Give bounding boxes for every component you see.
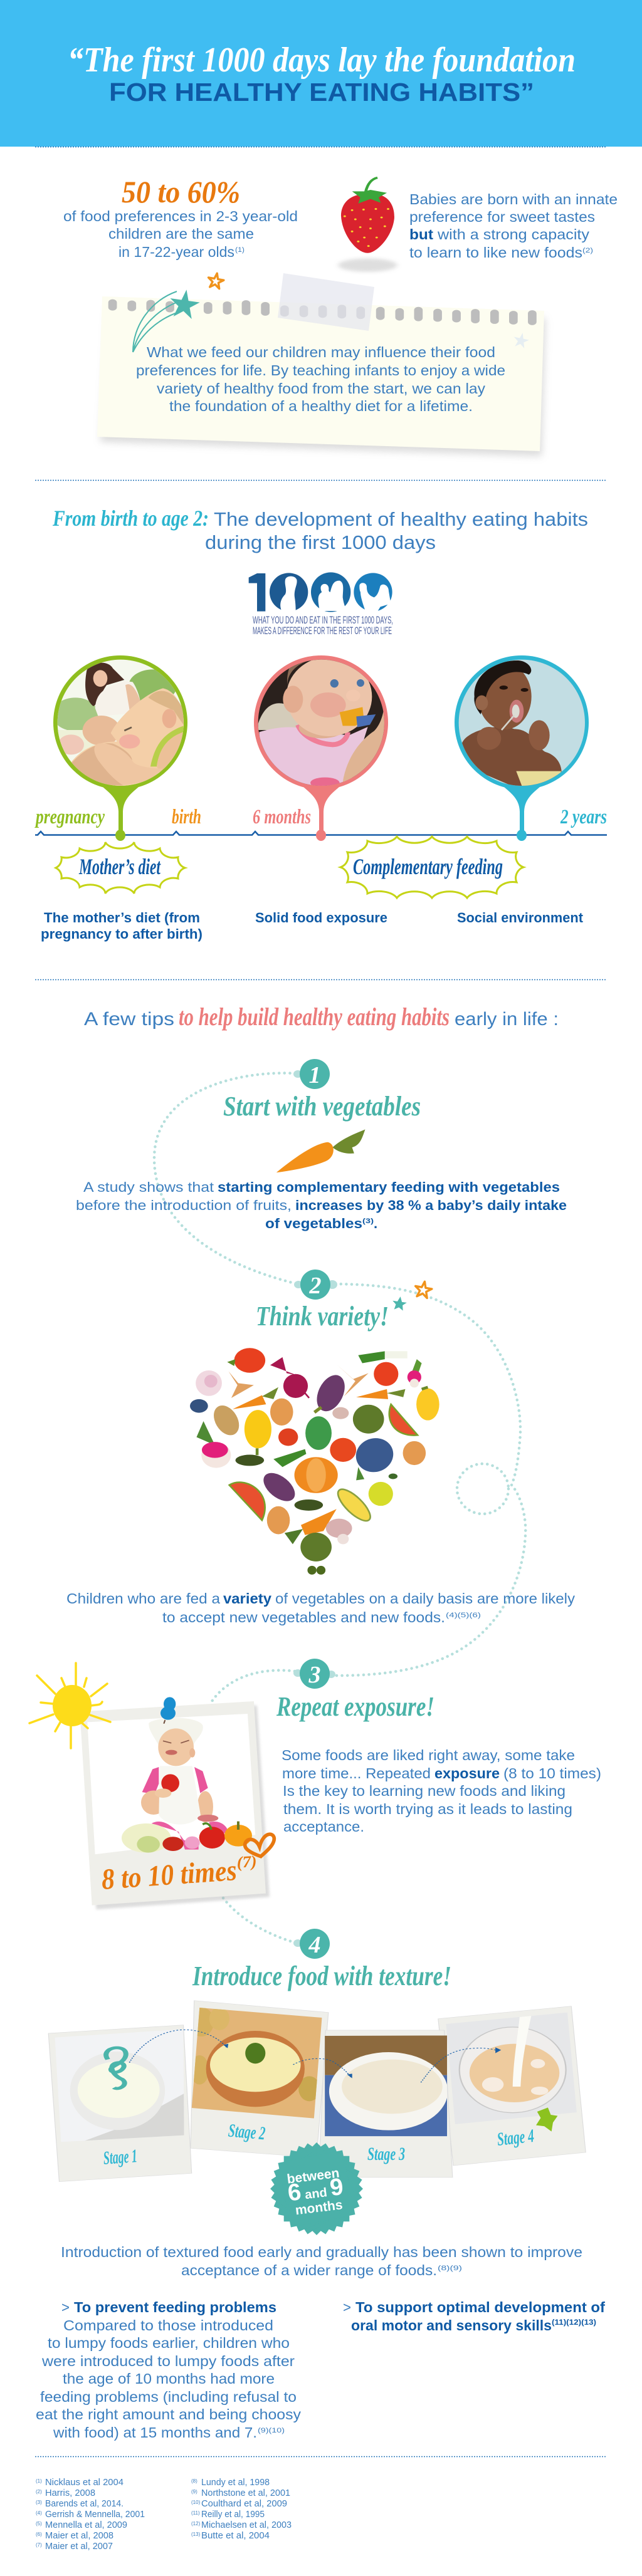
number 3: 3: [308, 1662, 321, 1688]
dotted path connectors: [154, 1073, 525, 1942]
text: variety: variety: [223, 1590, 271, 1607]
icon: orange star: [414, 1280, 433, 1298]
references column 1: Barends et al, 2014.: [45, 2498, 124, 2509]
references column 1: Maier et al, 2007: [45, 2541, 113, 2552]
text: mother's diet: [41, 910, 203, 942]
title line 2: FOR HEALTHY EATING HABITS”: [109, 78, 534, 107]
references column 1: (7): [36, 2542, 42, 2548]
references column 2: Reilly et al, 1995: [201, 2509, 265, 2520]
pin: pregnancy photo: [52, 655, 187, 841]
label: pregnancy: pregnancy: [34, 806, 105, 828]
references column 2: Butte et al, 2004: [201, 2530, 270, 2541]
badge: between 6 and 9 months: [270, 2142, 363, 2235]
text: babies preference: to learn to like new foods: [409, 244, 582, 261]
label: 6 months: 6 months: [253, 806, 311, 828]
text: babies preference: preference for sweet tastes: [409, 209, 595, 225]
text: repeated exposure: more time... Repeated: [282, 1765, 431, 1781]
heading: think variety: Think variety!: [256, 1301, 389, 1332]
tape: [278, 273, 374, 331]
heading: a few tips: to help build healthy eating habits: [179, 1003, 450, 1031]
header banner: [0, 0, 642, 147]
text: study: of vegetables: [265, 1216, 362, 1231]
text: prevent feeding problems: eat the right amount and being choosy: [36, 2406, 302, 2422]
pin: 6 months photo: [254, 655, 389, 841]
references column 1: (3): [36, 2500, 42, 2505]
text: oral motor skills: oral motor and sensory skills: [351, 2317, 552, 2334]
callout: complementary feeding: Complementary feeding: [353, 854, 503, 879]
text: mother's diet: The mother’s diet (from: [44, 910, 200, 926]
label: stage 3: Stage 3: [367, 2144, 405, 2164]
text: introduction of textured food: (8)(9): [438, 2265, 462, 2272]
references column 1: (6): [36, 2532, 42, 2537]
text: mother's diet: pregnancy to after birth): [41, 926, 203, 942]
references column 1: Harris, 2008: [45, 2488, 95, 2498]
heading: from birth to age 2: during the first 1000 days: [205, 531, 436, 553]
number 4: 4: [308, 1932, 321, 1958]
panel: notepaper: [97, 272, 545, 456]
references column 2: Michaelsen et al, 2003: [201, 2520, 292, 2530]
photo: stage 3: [318, 2030, 453, 2177]
text: variety: Children who are fed a: [66, 1590, 220, 1607]
references column 2: Lundy et al, 1998: [201, 2477, 270, 2488]
text: study: starting complementary feeding with vegetables: [218, 1179, 560, 1195]
stat: 50 to 60%: in 17-22-year olds: [118, 244, 234, 260]
text: prevent feeding problems: were introduced to lumpy foods after: [41, 2353, 295, 2369]
heading: from birth to age 2: The development of healthy eating habits: [214, 508, 588, 530]
text: prevent feeding problems: Compared to those introduced: [63, 2317, 273, 2334]
references column 1: (1): [36, 2478, 42, 2484]
text: prevent feeding problems: (9)(10): [258, 2427, 285, 2434]
references column 2: [191, 2477, 292, 2541]
references column 2: Northstone et al, 2001: [201, 2488, 290, 2498]
text: study: (3): [362, 1218, 374, 1225]
stat: 50 to 60%: of food preferences in 2-3 year-old: [63, 208, 298, 224]
note text: variety of healthy food from the start, we can lay: [157, 380, 486, 397]
number 1: [293, 1059, 330, 1089]
text: oral motor skills: [343, 2299, 605, 2334]
text: oral motor skills: (11)(12)(13): [552, 2318, 596, 2327]
icon: orange star: [207, 272, 224, 289]
heading: a few tips: A few tips: [84, 1009, 174, 1030]
caption: 8 to 10 times: 8 to 10 times: [100, 1854, 238, 1896]
text: variety: of vegetables on a daily basis are more likely: [275, 1590, 576, 1607]
text: variety: [66, 1590, 576, 1625]
text: variety: (4)(5)(6): [446, 1612, 481, 1619]
logo: 1000 days: [249, 572, 393, 637]
references column 1: Nicklaus et al 2004: [45, 2477, 124, 2488]
references column 2: (11): [191, 2510, 200, 2516]
label: stage 1: Stage 1: [103, 2146, 138, 2169]
references column 2: (8): [191, 2478, 197, 2484]
text: prevent feeding problems: [36, 2299, 302, 2441]
references column 2: (10): [191, 2500, 201, 2505]
references column 1: (5): [36, 2521, 42, 2526]
note text: the foundation of a healthy diet for a lifetime.: [169, 398, 473, 414]
callout: mother's diet: [56, 842, 185, 894]
references column 2: Coulthard et al, 2009: [201, 2498, 287, 2509]
icon: blue pushpin: [160, 1697, 176, 1724]
label: birth: birth: [172, 806, 201, 828]
number 4: [293, 1929, 330, 1959]
icon: carrot: [276, 1129, 365, 1172]
text: repeated exposure: (8 to 10 times): [503, 1765, 601, 1781]
text: babies preference: (2): [582, 247, 593, 254]
icon: shooting star: [133, 288, 201, 352]
caption: 8 to 10 times: (7): [236, 1852, 257, 1872]
number 2: [294, 1270, 337, 1300]
heading: repeat exposure: Repeat exposure!: [276, 1691, 434, 1722]
icon: faint star: [512, 331, 530, 349]
text: repeated exposure: exposure: [434, 1765, 500, 1781]
logo: 1000 days: WHAT YOU DO AND EAT IN THE FIRST 1000 DAYS,: [253, 614, 393, 626]
badge: between 6 and 9 months: 6 and 9: [287, 2174, 345, 2206]
icon: green star: [536, 2107, 557, 2132]
icon: orange heart: [245, 1834, 274, 1857]
heading: from birth to age 2: [52, 506, 588, 553]
icon: sun: [29, 1663, 110, 1748]
references column 1: Gerrish & Mennella, 2001: [45, 2509, 145, 2520]
text: repeated exposure: acceptance.: [283, 1818, 364, 1835]
number 1: 1: [308, 1062, 321, 1088]
icon: teal swirl: [106, 2048, 126, 2088]
callout: mother's diet: Mother’s diet: [78, 854, 161, 879]
text: study: A study shows that: [83, 1179, 214, 1195]
text: repeated exposure: Is the key to learning new foods and liking: [283, 1783, 566, 1799]
photos: texture stages: [48, 2001, 586, 2182]
text: babies preference: Babies are born with an innate: [409, 191, 618, 207]
photo: stage 2: [189, 2001, 329, 2157]
text: prevent feeding problems: the age of 10 months had more: [63, 2370, 275, 2387]
references column 1: (4): [36, 2510, 42, 2516]
note text: preferences for life. By teaching infants to enjoy a wide: [136, 362, 505, 378]
heading: a few tips: early in life :: [455, 1009, 559, 1030]
text: babies preference: [409, 191, 618, 261]
stat: 50 to 60%: children are the same: [108, 226, 254, 242]
references column 2: (13): [191, 2532, 201, 2537]
text: babies preference: but: [409, 226, 433, 242]
text: repeated exposure: them. It is worth trying as it leads to lasting: [283, 1801, 572, 1817]
label: stage 4: Stage 4: [496, 2125, 535, 2150]
text: prevent feeding problems: To prevent feeding problems: [74, 2299, 276, 2315]
text: variety: to accept new vegetables and new foods.: [162, 1609, 445, 1625]
stat: 50 to 60%: 50 to 60%: [122, 174, 240, 209]
photo: polaroid baby: [80, 1697, 274, 1909]
pin: 2 years photo: [455, 655, 589, 841]
icon: strawberry: [338, 178, 397, 272]
note text: [136, 344, 505, 414]
logo: 1000 days: MAKES A DIFFERENCE FOR THE REST OF YOUR LIFE: [253, 625, 392, 637]
photo: stage 4: [438, 2006, 586, 2166]
text: introduction of textured food: Introduction of textured food early and gradually has been shown to improve: [61, 2244, 582, 2260]
text: repeated exposure: [282, 1747, 601, 1835]
references column 1: Maier et al, 2008: [45, 2530, 113, 2541]
text: oral motor skills: To support optimal development of: [355, 2299, 605, 2315]
text: study: increases by 38 % a baby’s daily intake: [295, 1197, 567, 1213]
text: prevent feeding problems: feeding problems (including refusal to: [40, 2389, 297, 2405]
photo: stage 1: [48, 2025, 192, 2182]
text: study: before the introduction of fruits,: [76, 1197, 292, 1213]
badge: between 6 and 9 months: months: [295, 2198, 344, 2218]
references column 2: (12): [191, 2521, 201, 2526]
callout: complementary feeding: [340, 837, 524, 898]
text: study: [76, 1179, 567, 1231]
stat: 50 to 60%: [63, 174, 298, 260]
timeline line: [35, 832, 607, 835]
icon: teal star: [391, 1296, 408, 1311]
text: solid food: Solid food exposure: [255, 910, 387, 926]
references column 1: [36, 2477, 145, 2552]
text: oral motor skills: >: [343, 2299, 351, 2315]
references column 1: Mennella et al, 2009: [45, 2520, 127, 2530]
text: introduction of textured food: [61, 2244, 582, 2278]
text: study: .: [374, 1216, 377, 1231]
title line 1: “The first 1000 days lay the foundation: [68, 41, 576, 80]
references column 1: (2): [36, 2489, 42, 2495]
label: 2 years: 2 years: [560, 806, 607, 828]
note text: What we feed our children may influence their food: [147, 344, 495, 360]
heading: start with vegetables: Start with vegetables: [223, 1091, 421, 1122]
number 2: 2: [308, 1273, 321, 1299]
text: repeated exposure: Some foods are liked right away, some take: [282, 1747, 575, 1763]
text: prevent feeding problems: to lumpy foods earlier, children who: [48, 2335, 290, 2351]
arrows: stage connectors: [129, 2030, 498, 2082]
text: social environment: Social environment: [457, 910, 584, 926]
icon: vegetable heart: [190, 1348, 439, 1575]
text: prevent feeding problems: >: [61, 2299, 70, 2315]
stat: 50 to 60%: (1): [235, 246, 245, 254]
text: babies preference: with a strong capacity: [437, 226, 590, 242]
text: introduction of textured food: acceptance of a wider range of foods.: [181, 2262, 437, 2278]
heading: introduce food with texture: Introduce food with texture!: [192, 1961, 451, 1991]
references column 2: (9): [191, 2489, 197, 2495]
heading: from birth to age 2: From birth to age 2:: [52, 506, 209, 531]
text: prevent feeding problems: with food) at 15 months and 7.: [53, 2424, 257, 2441]
label: stage 2: Stage 2: [228, 2120, 266, 2144]
number 3: [293, 1659, 335, 1689]
badge: between 6 and 9 months: between: [286, 2166, 340, 2187]
